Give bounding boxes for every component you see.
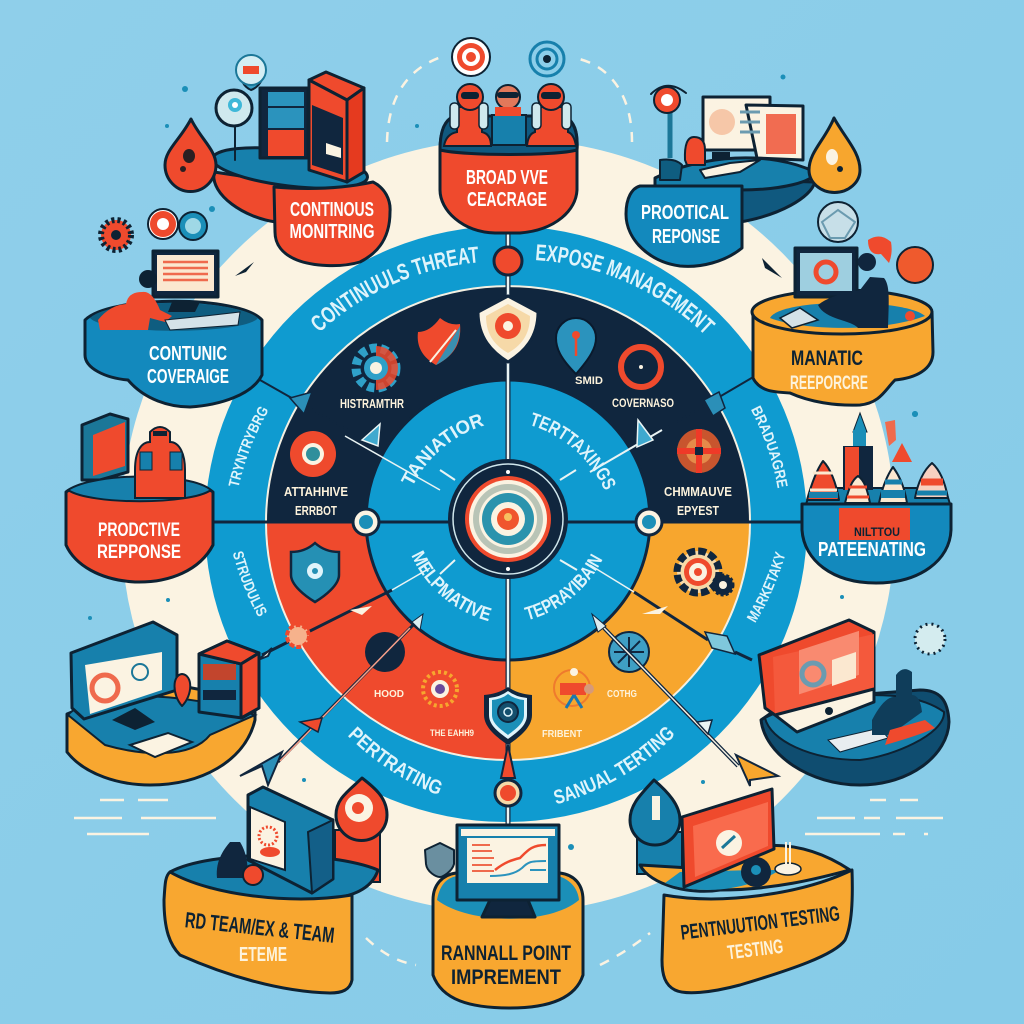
platform top [640,845,850,891]
label: teprayibain: TEPRAYIBAIN [524,554,602,620]
base [67,680,255,785]
lower left red segment [266,522,508,760]
icon: red ring [621,347,661,387]
text: broad coverage [466,167,548,211]
module: continuous monitoring [165,55,390,266]
lower right long arrow [592,614,778,786]
text: manatic reporcre: REEPORCRE [790,373,868,394]
decorative speed lines right [805,800,943,834]
icon: globe [818,202,858,242]
monitor [153,251,218,297]
text: patteenating: NILTTOU [854,525,900,539]
label: upper left ring: TRYNTRYBRG [228,406,268,486]
central target [448,459,568,579]
drop [809,118,860,192]
module: continuous coverage [85,209,262,407]
red block [839,508,910,540]
figure left [444,84,491,146]
text: broad coverage: BROAD VVE [466,167,548,189]
icon: brain [897,247,933,283]
backpack figure [217,842,248,878]
icon: person and desk [660,137,760,180]
team figures [444,84,576,146]
icon: gears target [677,551,733,595]
red figure [135,427,185,498]
text: continuous monitoring: MONITRING [290,221,374,243]
label: lower right ring: MARKETAKY [746,551,785,623]
lower left long arrow [240,614,423,785]
label: cothg: COTHG [607,689,637,700]
text: rannall point improvement: RANNALL POINT [441,942,571,965]
dish top [806,488,950,504]
drum [440,116,577,233]
label: the eahh9: THE EAHH9 [430,728,474,738]
central radial diagram [206,228,806,824]
text: penetration testing [679,902,841,964]
label: continuous threat: CONTINUULS THREAT [312,246,478,330]
red cylinder [335,830,380,882]
decorative speed lines left [74,800,216,834]
tab [626,186,742,266]
module: patteenating [802,411,951,583]
monitor [457,825,559,917]
desk gear [741,842,801,887]
label: tertiary: TERTTAXINGS [532,412,616,490]
text: proactive response [97,520,181,563]
label: penetrating: PERTRATING [348,726,442,794]
module: penetration testing [630,780,852,993]
text: broad coverage: CEACRAGE [467,189,547,211]
text: continuous monitoring: CONTINOUS [290,199,374,221]
icon: blue target [179,212,207,240]
module: proactive response [66,414,213,582]
icon: compass wheel [677,429,721,473]
domes [807,461,948,503]
outer blue ring [205,226,807,822]
decorative dots [88,74,918,850]
keyboard [828,728,888,752]
label: exposure management: EXPOSE MANAGEMENT [536,244,716,333]
label: fribent: FRIBENT [542,729,582,740]
text: red team [184,907,336,966]
text: continuous coverage: CONTUNIC [149,343,227,365]
label: hood: HOOD [374,689,404,700]
lower left short arrow [258,568,430,660]
icon: blue shield lower left [291,543,339,602]
icon: eye sensor [651,86,686,158]
orange label body [662,870,852,993]
monitor [703,97,803,160]
module: practical response [626,86,860,266]
label: attahhive errbot [284,484,348,518]
drum top [752,290,932,334]
icon: location pin [556,318,596,374]
server cabinet [260,88,308,158]
ring nodes [353,247,662,806]
text: practical response [641,202,729,248]
text: red team: RD TEAM/EX & TEAM [184,907,336,948]
drum body [753,300,933,405]
base body [66,478,213,582]
arrow marker right [762,258,782,278]
speech target drop [336,778,387,840]
text: continuous monitoring [290,199,374,243]
platform top [210,141,370,195]
label: tarnation: TANIATIOR [400,414,484,484]
icon: broken red shield [418,318,460,365]
text: patteenating [818,525,926,561]
blue drop and cylinder [630,780,682,874]
platform band [214,172,300,222]
icon: red gear [101,220,131,250]
decorative dashed arcs [366,57,650,965]
monitor [759,620,874,732]
module: bottom left workstation [67,622,259,785]
base body [802,504,951,583]
spokes around target [440,470,577,574]
icon: magnifier [216,90,252,160]
platform top [68,696,255,753]
label: melpmative: MELPMATIVE [412,550,492,622]
orange label body [164,872,352,993]
text: practical response: PROOTICAL [641,202,729,224]
drum interior [90,303,258,331]
marker icons [885,411,918,462]
label: chmmauve epyest: EPYEST [677,503,719,518]
text: continuous coverage: COVERAIGE [147,366,229,388]
text: manatic reporcre [790,347,868,394]
label: histramthr: HISTRAMTHR [340,396,404,411]
red server box [199,641,259,718]
text: proactive response: REPPONSE [97,542,181,563]
lower right short arrow [590,565,752,660]
icon: small shield [425,843,454,877]
label: upper right ring: BRADUAGRE [751,405,788,488]
tower [248,787,333,893]
target gear [915,624,945,654]
upper navy segment [266,286,750,522]
pin [174,674,190,706]
book monitor [82,414,128,480]
label: lower left ring: STRUDULIS [233,551,266,616]
platform top [68,476,211,501]
monitor [682,789,774,887]
text: patteenating: PATEENATING [818,539,926,561]
upper left connector arrow [260,380,440,490]
red cabinet [309,72,364,182]
icon: speech bubble [236,55,266,90]
module: broad coverage [440,38,577,233]
text: red team: ETEME [239,944,287,966]
figure right [527,84,576,146]
monitor [71,622,177,719]
icon: blue target [530,42,564,76]
text: rannall point improvement [441,942,571,989]
module: red team [164,778,387,993]
platform top [170,855,378,902]
icon: drop [165,119,216,192]
icon: red target [452,38,490,76]
text: rannall point improvement: IMPREMENT [451,966,561,989]
label: chmmauve epyest [664,484,732,518]
person at desk [780,253,915,328]
drum top [437,876,579,919]
ring labels [228,244,788,804]
platform [761,690,949,785]
icon: team network [554,668,594,708]
platform top [440,116,577,154]
module: manatic reporcre [752,202,933,405]
drum body [433,873,583,1008]
desk items [130,733,192,757]
text: penetration testing: TESTING [726,936,784,964]
label: manual testing: SANUAL TERTING [554,727,674,804]
figure centre [492,85,526,145]
text: penetration testing: PENTNUUTION TESTING [679,902,841,945]
tower [843,413,873,490]
label: covernaso: COVERNASO [612,396,674,410]
inner blue circle [366,380,650,660]
icon: bottom shield [484,687,532,778]
person [872,669,922,735]
upper right connector arrow [590,376,755,472]
text: practical response: REPONSE [652,226,720,248]
text: continuous coverage [147,343,229,388]
icon: top shield target [478,296,538,362]
icon: red target [148,209,178,239]
axis lines [205,520,810,524]
platform band [740,180,815,222]
icon: chat bubble [868,236,892,263]
cream backdrop circle [121,139,895,913]
person [98,270,240,330]
icon: sun flower [423,672,457,706]
module: rannall point improvement [425,825,583,1008]
text: manatic reporcre: MANATIC [791,347,863,370]
platform top [655,158,815,190]
label: smid: SMID [575,375,603,387]
text: proactive response: PRODCTIVE [98,520,180,541]
drum body [85,301,262,407]
label: attahhive errbot: ATTAHHIVE [284,484,348,499]
module: bottom right workstation [759,620,949,785]
label: attahhive errbot: ERRBOT [295,503,337,518]
drum body and tab [274,182,390,266]
label: chmmauve epyest: CHMMAUVE [664,484,732,499]
icon: red circle target [290,431,336,477]
monitor [795,248,857,297]
lower right orange segment [508,522,750,760]
icon: gear [356,346,398,390]
arrow marker [235,262,254,276]
